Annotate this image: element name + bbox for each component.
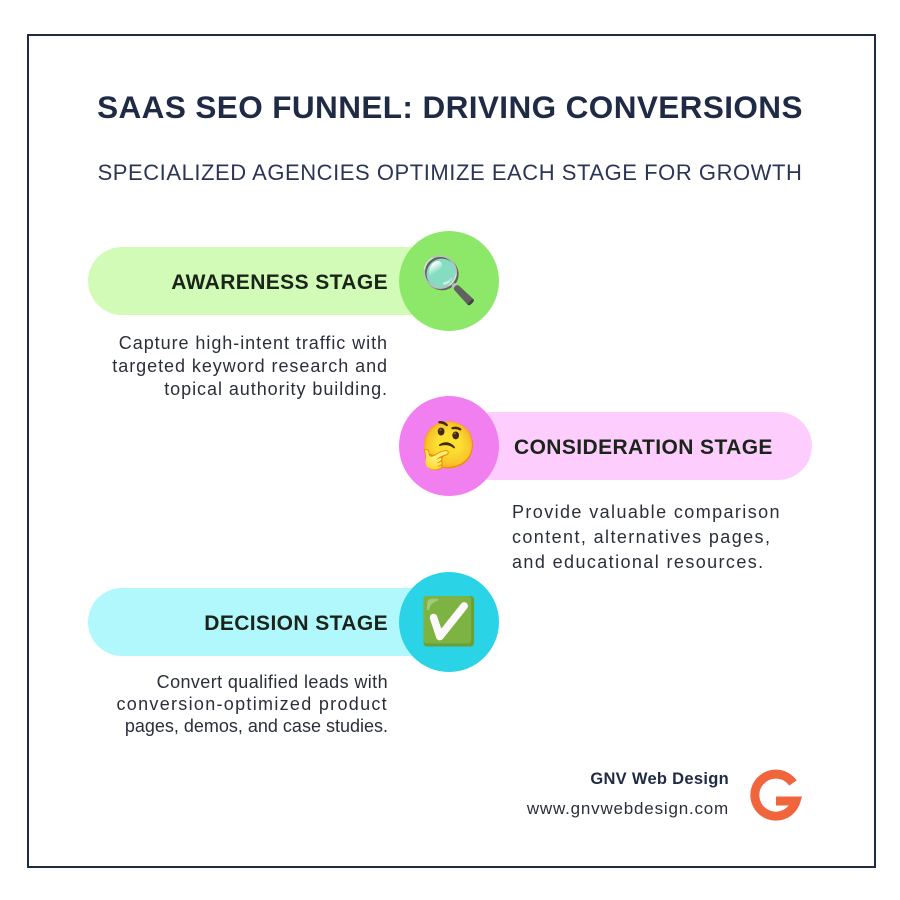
decision heading: DECISION STAGE (204, 612, 388, 635)
decision description: Convert qualified leads with (157, 672, 388, 692)
stage: consideration (399, 396, 812, 572)
consideration pill (459, 412, 812, 480)
decision description (116, 672, 388, 736)
decision description: pages, demos, and case studies. (125, 716, 388, 736)
awareness pill (88, 247, 448, 315)
stage: decision (88, 572, 499, 736)
icon: magnifier (399, 231, 499, 331)
consideration description: content, alternatives pages, (512, 527, 771, 547)
consideration description: Provide valuable comparison (512, 502, 781, 522)
stage: awareness (88, 231, 499, 399)
icon: thinking face: 🤔 (420, 419, 478, 473)
brand name: GNV Web Design (590, 770, 729, 788)
awareness heading: AWARENESS STAGE (171, 271, 388, 294)
footer brand (526, 770, 802, 821)
consideration description: and educational resources. (512, 552, 765, 572)
awareness description: topical authority building. (164, 379, 388, 399)
awareness description: targeted keyword research and (112, 356, 388, 376)
icon: magnifier: 🔍 (420, 254, 478, 308)
icon: thinking face (399, 396, 499, 496)
title: SAAS SEO FUNNEL: DRIVING CONVERSIONS (97, 89, 803, 125)
decision description: conversion-optimized product (116, 694, 388, 714)
logo (750, 770, 802, 821)
icon: check (399, 572, 499, 672)
consideration heading: CONSIDERATION STAGE (514, 436, 773, 459)
consideration description (512, 502, 781, 572)
awareness description (112, 333, 388, 399)
icon: check: ✅ (420, 595, 478, 649)
subtitle: SPECIALIZED AGENCIES OPTIMIZE EACH STAGE FOR GROWTH (98, 160, 802, 185)
decision pill (88, 588, 448, 656)
awareness description: Capture high-intent traffic with (119, 333, 388, 353)
brand url: www.gnvwebdesign.com (527, 799, 729, 818)
